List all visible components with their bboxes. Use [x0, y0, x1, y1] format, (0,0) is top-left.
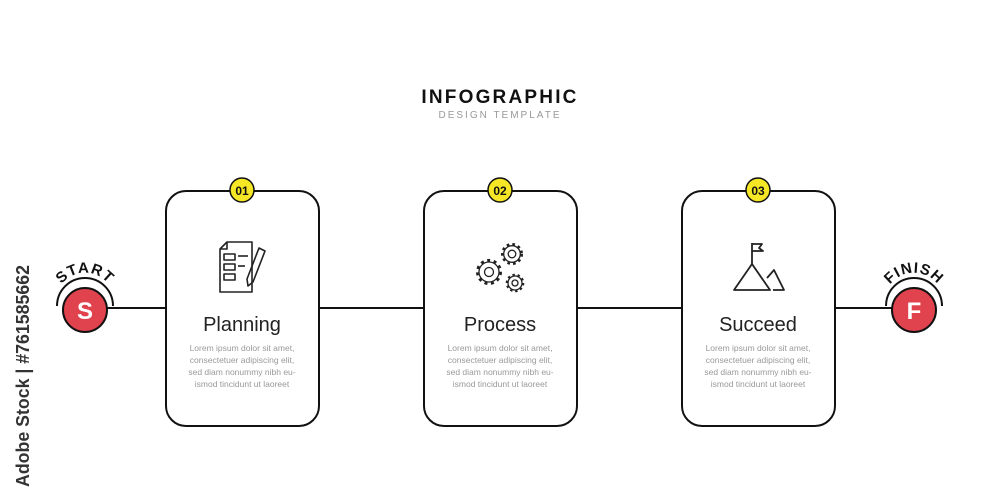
badge 01 — [230, 178, 254, 202]
timeline line — [100, 307, 900, 309]
icon: mountain with flag — [734, 243, 784, 290]
subtitle: DESIGN TEMPLATE — [439, 110, 561, 121]
heading: succeed: Succeed — [719, 314, 797, 336]
badge 03 — [746, 178, 770, 202]
text block — [446, 343, 554, 389]
text block: consectetuer adipiscing elit, — [706, 355, 810, 365]
watermark text: Adobe Stock | #761585662 — [13, 265, 33, 487]
text block: consectetuer adipiscing elit, — [190, 355, 294, 365]
title: INFOGRAPHIC — [421, 87, 579, 108]
text block — [188, 343, 296, 389]
text block: ismod tincidunt ut laoreet — [711, 379, 806, 389]
badge 01: 01 — [235, 184, 249, 198]
start label: START — [56, 262, 115, 282]
panel: process — [424, 178, 577, 426]
finish marker: F — [907, 298, 921, 325]
badge 02: 02 — [493, 184, 507, 198]
panel: planning — [166, 178, 319, 426]
start marker: S — [77, 298, 93, 325]
text block — [704, 343, 812, 389]
icon: gears — [478, 244, 523, 291]
badge 03: 03 — [751, 184, 765, 198]
start marker — [56, 262, 115, 333]
heading: planning: Planning — [203, 314, 281, 336]
text block: sed diam nonummy nibh eu- — [188, 367, 296, 377]
text block: sed diam nonummy nibh eu- — [704, 367, 812, 377]
text block: Lorem ipsum dolor sit amet, — [706, 343, 810, 353]
badge 02 — [488, 178, 512, 202]
text block: consectetuer adipiscing elit, — [448, 355, 552, 365]
text block: Lorem ipsum dolor sit amet, — [190, 343, 294, 353]
text block: sed diam nonummy nibh eu- — [446, 367, 554, 377]
finish label: FINISH — [884, 262, 944, 284]
text block: ismod tincidunt ut laoreet — [453, 379, 548, 389]
finish marker — [884, 262, 944, 333]
heading: process: Process — [464, 314, 536, 336]
icon: document with pencil — [220, 242, 265, 292]
text block: Lorem ipsum dolor sit amet, — [448, 343, 552, 353]
panel: succeed — [682, 178, 835, 426]
text block: ismod tincidunt ut laoreet — [195, 379, 290, 389]
title — [421, 87, 579, 121]
